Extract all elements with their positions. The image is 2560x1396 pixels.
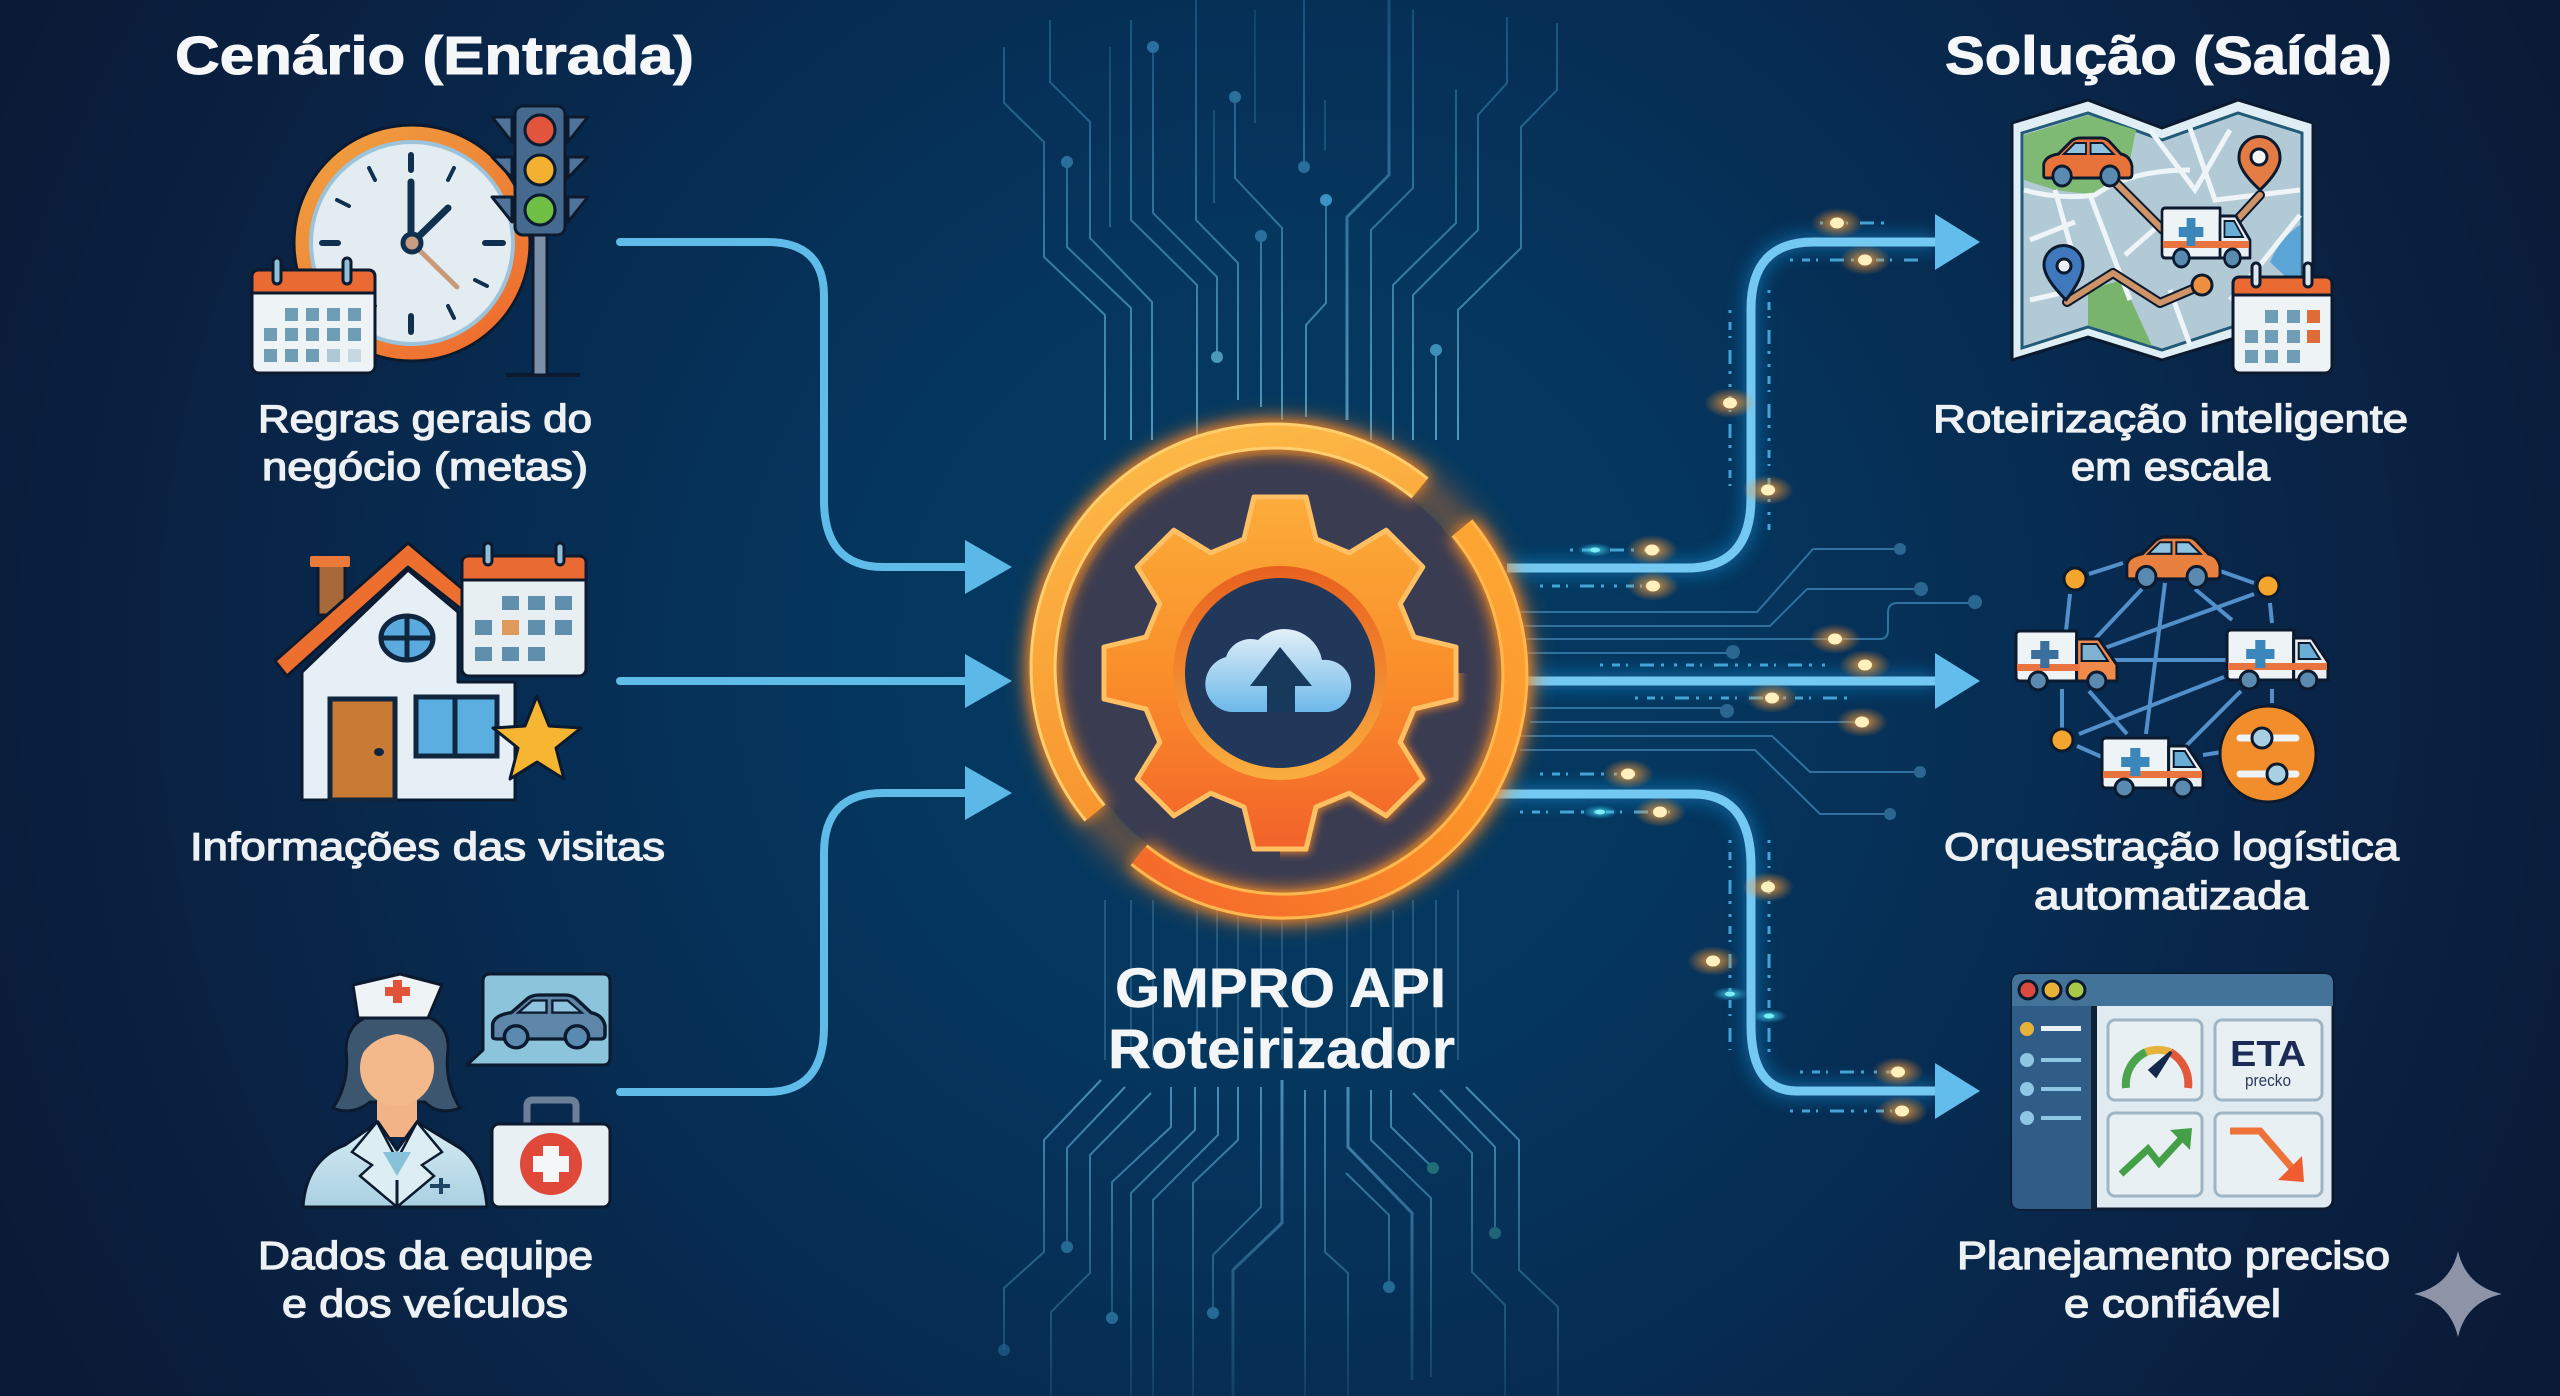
icon: nurse, car bubble and medical kit bbox=[303, 974, 610, 1207]
output arrows bbox=[1493, 208, 1980, 1126]
light sparks bbox=[1577, 208, 1928, 1126]
arrow: hub to routing bbox=[1507, 214, 1980, 568]
label: em escala: em escala bbox=[2071, 446, 2270, 489]
round window bbox=[381, 616, 433, 660]
star bbox=[493, 696, 581, 779]
ring arc: lower right bbox=[1139, 528, 1515, 906]
label: Orquestração logística: Orquestração logística bbox=[1944, 826, 2399, 869]
map route bbox=[2067, 180, 2260, 303]
calendar bbox=[252, 258, 375, 373]
clock bbox=[294, 125, 530, 361]
icon: vehicle network bbox=[2016, 537, 2328, 802]
orange pin bbox=[2239, 136, 2280, 190]
circuit traces above the hub bbox=[1004, 0, 1557, 440]
heading: Cenário: Cenário (Entrada) bbox=[175, 26, 694, 86]
label: Dados da equipe: Dados da equipe bbox=[258, 1235, 593, 1278]
tile: gauge bbox=[2108, 1020, 2202, 1100]
ambulance left bbox=[2016, 631, 2117, 690]
thin fan-out traces on the right of the hub bbox=[1510, 543, 1982, 820]
tile: falling trend bbox=[2215, 1113, 2322, 1196]
window bbox=[416, 697, 497, 756]
icon: clock, traffic light and calendar bbox=[252, 106, 588, 377]
chimney bbox=[310, 556, 350, 615]
icon: sparkle watermark bbox=[2414, 1251, 2502, 1337]
network nodes bbox=[2051, 568, 2279, 751]
car on map bbox=[2044, 138, 2132, 186]
traffic light bbox=[492, 106, 588, 377]
blue pin bbox=[2044, 246, 2083, 300]
medical kit bbox=[492, 1100, 610, 1207]
sidebar bbox=[2012, 1006, 2097, 1209]
label: e dos veículos: e dos veículos bbox=[282, 1283, 568, 1326]
network links bbox=[2062, 563, 2272, 757]
tile: ETA: precko bbox=[2245, 1071, 2291, 1090]
arrow: hub to orchestration bbox=[1528, 653, 1980, 709]
ring arc: upper left bbox=[1043, 436, 1420, 813]
arrow: team to hub bbox=[620, 766, 1012, 1092]
roof bbox=[275, 543, 465, 676]
label: automatizada: automatizada bbox=[2034, 875, 2308, 918]
gear bbox=[1104, 497, 1456, 849]
cloud upload icon bbox=[1205, 629, 1351, 712]
label: Informações das visitas: Informações das visitas bbox=[190, 826, 665, 869]
nurse bbox=[303, 974, 487, 1207]
ambulance right bbox=[2227, 630, 2328, 689]
input arrows bbox=[620, 242, 1012, 1092]
label: Regras gerais: Regras gerais do bbox=[258, 398, 592, 441]
dotted data streams bbox=[1520, 223, 1920, 1111]
calendar bbox=[2233, 263, 2332, 373]
icon: folded map with route bbox=[2012, 100, 2332, 373]
hub title: GMPRO API: GMPRO API bbox=[1115, 956, 1446, 1019]
label: Planejamento preciso: Planejamento preciso bbox=[1957, 1235, 2390, 1278]
hub glow bbox=[1043, 436, 1515, 906]
icon: dashboard window bbox=[2012, 974, 2333, 1209]
arrow: visits to hub bbox=[620, 654, 1012, 708]
arrow: hub to planning bbox=[1493, 794, 1980, 1119]
door bbox=[330, 699, 395, 800]
car bbox=[2127, 537, 2220, 587]
ambulance on map bbox=[2162, 208, 2250, 267]
label: e confiável: e confiável bbox=[2064, 1283, 2281, 1326]
settings sliders bbox=[2220, 706, 2316, 802]
tile: ETA bbox=[2215, 1020, 2322, 1100]
arrow glow bbox=[1493, 242, 1935, 1091]
ambulance bottom bbox=[2102, 738, 2203, 797]
calendar bbox=[462, 543, 586, 676]
tile: rising trend bbox=[2108, 1113, 2202, 1196]
label: negócio (metas): negócio (metas) bbox=[262, 446, 588, 489]
arrow: rules to hub bbox=[620, 242, 1012, 594]
icon: house, calendar and star bbox=[275, 543, 586, 800]
map sheet bbox=[2012, 100, 2313, 360]
label: Roteirização inteligente: Roteirização inteligente bbox=[1933, 398, 2408, 441]
hub title: Roteirizador: Roteirizador bbox=[1108, 1017, 1455, 1080]
circuit traces below the hub bbox=[998, 1080, 1558, 1396]
car speech bubble bbox=[467, 974, 610, 1065]
traces running behind the core label bbox=[1105, 890, 1458, 1060]
route end dot bbox=[2192, 275, 2212, 295]
central hub: gear with ring bbox=[1043, 436, 1515, 906]
tile: ETA: ETA bbox=[2230, 1033, 2306, 1074]
window frame bbox=[2012, 974, 2333, 1209]
heading: Solução: Solução (Saída) bbox=[1945, 26, 2392, 86]
house body bbox=[302, 570, 515, 800]
